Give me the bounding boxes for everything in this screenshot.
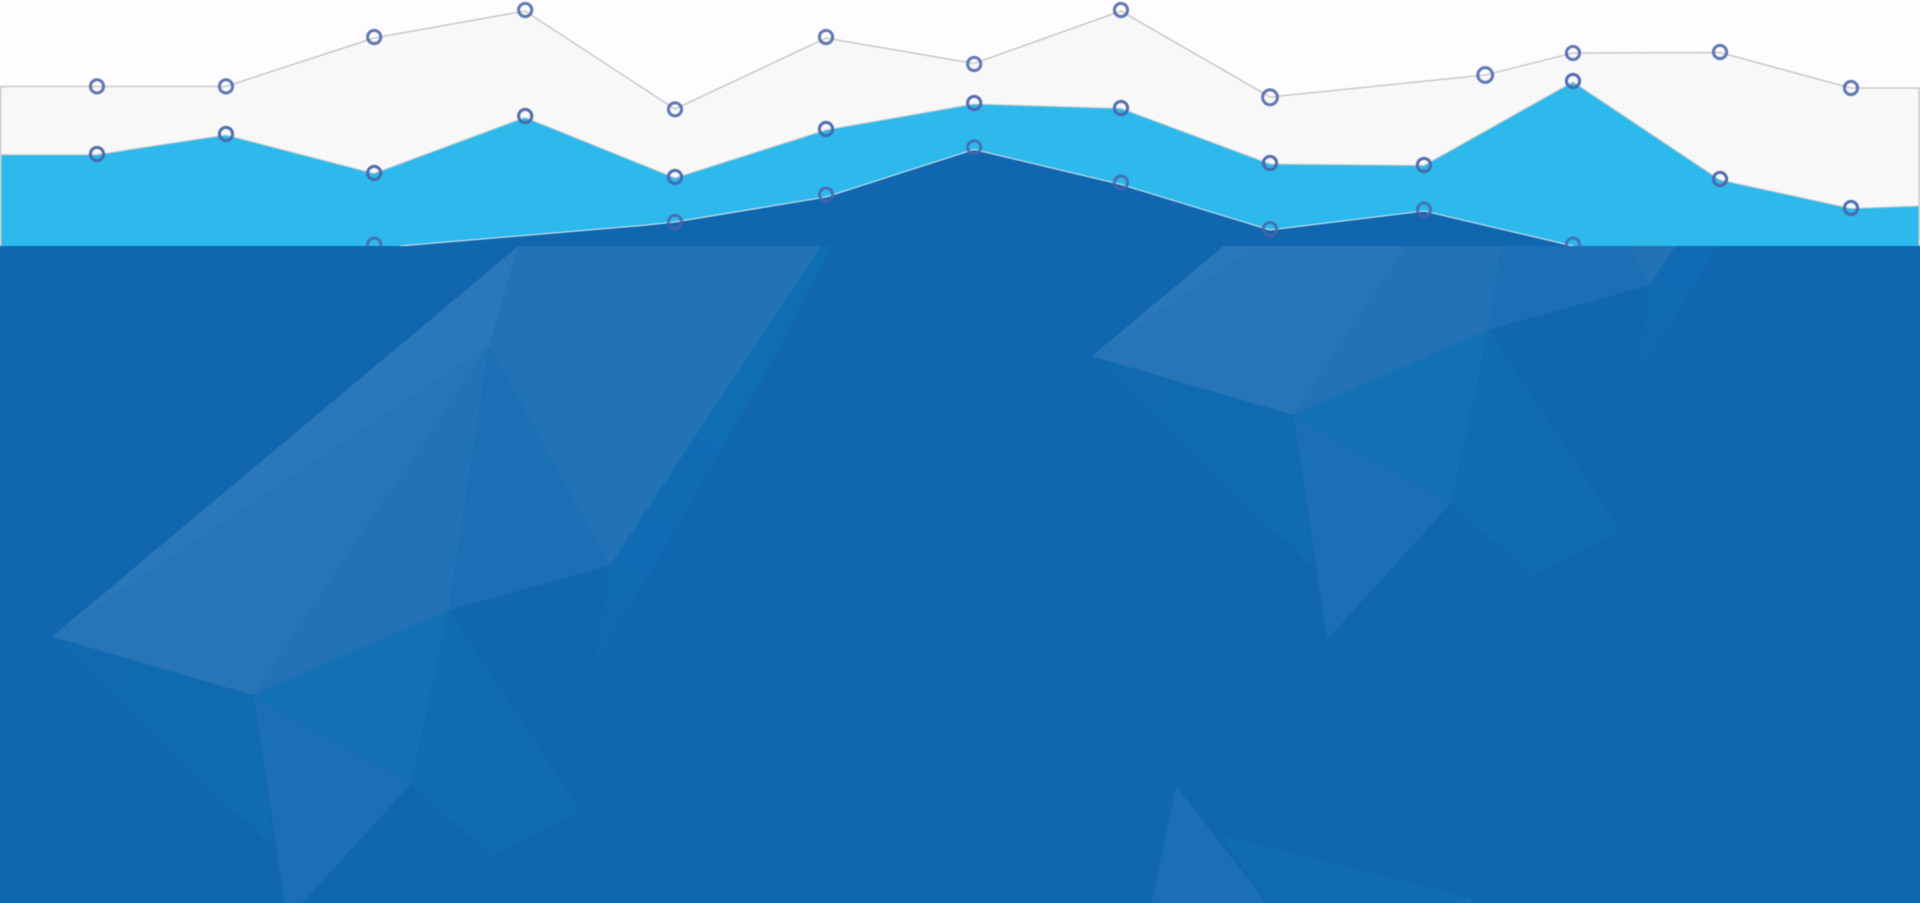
markers: middle series [90,74,1858,215]
area chart: three stacked series [0,3,1920,260]
markers: top series [90,3,1858,116]
series area: dark blue [374,150,1590,260]
series area: light grey [0,11,1920,247]
iceberg: left [52,246,832,903]
series outline: light grey [1,11,1919,247]
iceberg: bottom fragment [1150,786,1471,903]
series area: cyan [1,82,1919,247]
markers: bottom series [368,141,1580,251]
background: sky [0,0,1920,254]
iceberg: right [1092,246,1675,638]
water: deep blue panel [0,246,1920,903]
